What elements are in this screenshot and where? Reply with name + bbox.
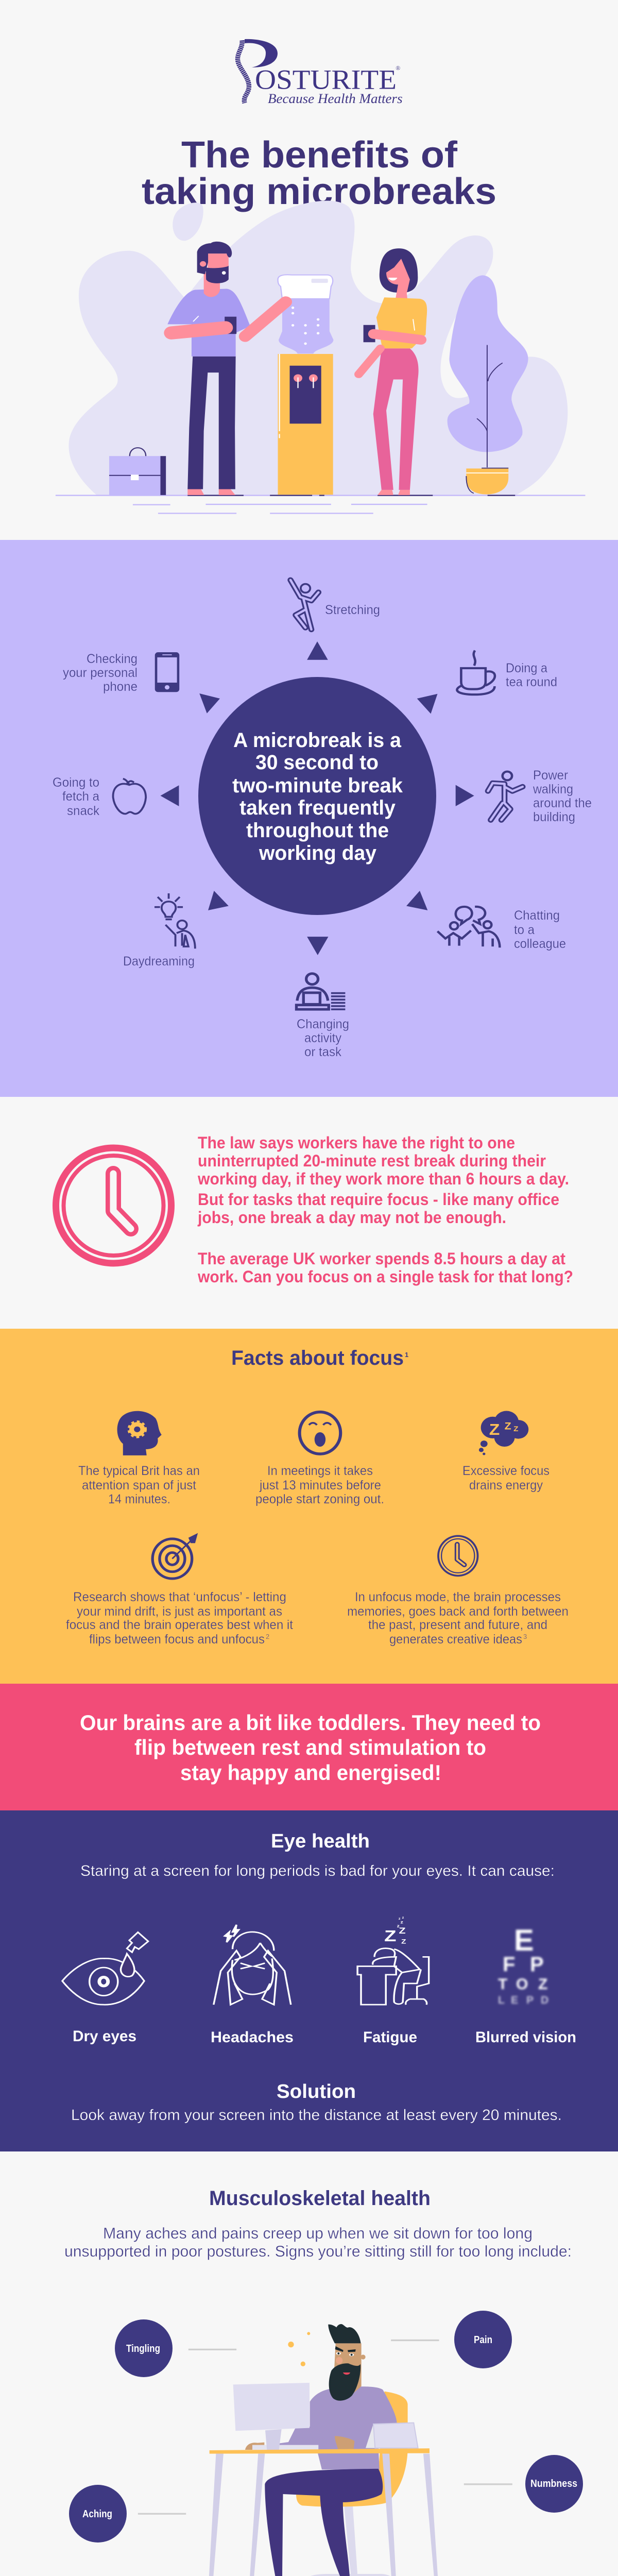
item: power walking [488,768,592,824]
sign: numbness [525,2455,583,2513]
item: fatigue: Z [399,1926,406,1936]
item: fatigue: Z [384,1928,397,1945]
item: fatigue [357,1916,429,2046]
item: phone: phone [103,680,138,694]
logo: Posturite: OSTURITE [255,64,397,95]
plant [448,275,528,495]
item: chatting: to a [514,923,535,937]
central circle: 30 second to [255,751,379,774]
fact: excessive focus: Z [505,1420,511,1432]
sign: aching: Aching [82,2509,112,2520]
text: the law: The average UK worker spends 8.5 hours a day at [198,1249,565,1268]
item: power walking: walking [533,782,573,796]
banner: toddlers: stay happy and energised! [180,1760,441,1785]
item: blurred vision: E [511,1994,518,2006]
item: fatigue: z [401,1920,403,1925]
fact: excessive focus: Excessive focus [462,1464,550,1478]
fact: unfocus: flips between focus and unfocus [89,1632,265,1647]
item: fatigue: Fatigue [363,2029,417,2046]
text: the law: But for tasks that require focus - like many office [198,1190,559,1209]
fact: excessive focus: Z [489,1420,500,1438]
item: power walking: Power [533,768,568,783]
intro text [64,2224,572,2260]
fact: meetings: just 13 minutes before [259,1478,381,1493]
fact: unfocus: your mind drift, is just as important as [77,1604,282,1619]
item: fatigue: z [402,1916,404,1920]
item: changing activity: activity [304,1031,341,1045]
panel: what is a microbreak [0,540,618,1097]
item: blurred vision [475,1924,576,2046]
title: The benefits of [181,134,458,176]
item: snack: fetch a [62,789,99,804]
item: headaches: Headaches [211,2029,294,2046]
woman [358,248,427,495]
item: tea round: Doing a [506,661,547,675]
connector lines [138,2340,512,2514]
central circle: two-minute break [232,774,403,797]
item: phone: Checking [87,652,138,666]
item: snack: snack [67,804,99,818]
sign: aching [69,2485,127,2543]
panel: musculoskeletal health [64,2187,583,2576]
panel: eye health [0,1810,618,2151]
item: phone [63,652,179,694]
text: the law: The law says workers have the right to one [198,1133,515,1152]
item: stretching [290,580,380,630]
item: daydreaming: Daydreaming [123,954,195,969]
panel: the law on breaks [56,1133,573,1286]
banner: toddlers: flip between rest and stimulation to [134,1735,486,1759]
fact: unfocus [66,1533,293,1647]
hero illustration: colleagues at water cooler [56,201,585,513]
arrows around circle [160,641,474,955]
fact: unfocus: 2 [266,1633,269,1640]
fact: attention span: attention span of just [82,1478,196,1493]
item: snack [53,775,146,818]
item: phone: your personal [63,666,138,680]
title [142,134,496,212]
item: headaches [211,1925,294,2046]
item: power walking: building [533,810,575,824]
item: chatting: Chatting [514,908,560,923]
fact: attention span [78,1411,200,1506]
text: the law: working day, if they work more than 6 hours a day. [197,1170,569,1188]
banner: toddlers [0,1684,618,1810]
intro text: Many aches and pains creep up when we sit down for too long [103,2224,533,2242]
central circle: A microbreak is a [233,729,402,752]
fact: brain in unfocus mode: generates creative ideas [389,1632,522,1647]
item: blurred vision: Z [538,1976,547,1993]
item: chatting: colleague [514,937,566,951]
item: changing activity: Changing [297,1017,349,1031]
item: power walking: around the [533,796,592,810]
item: tea round: tea round [506,675,557,689]
text: the law: jobs, one break a day may not be enough. [197,1208,506,1227]
fact: brain in unfocus mode: 3 [523,1633,527,1640]
central circle [198,677,436,915]
item: blurred vision: Blurred vision [475,2029,576,2046]
solution text: Look away from your screen into the distance at least every 20 minutes. [71,2107,562,2124]
heading: Facts about focus [231,1347,404,1369]
item: blurred vision: T [498,1976,507,1993]
item: blurred vision: P [530,1953,544,1976]
heading: solution: Solution [277,2081,356,2103]
logo: Posturite: ® [396,64,400,72]
text: the law: uninterrupted 20-minute rest break during their [198,1151,546,1170]
fact: excessive focus [462,1411,550,1493]
sign: tingling [115,2319,173,2377]
heading: Musculoskeletal health [209,2187,431,2210]
fact: excessive focus: Z [513,1425,519,1433]
item: blurred vision: P [526,1994,534,2006]
banner: toddlers: Our brains are a bit like toddlers. They need to [80,1710,541,1735]
heading: eye health: Eye health [271,1831,370,1852]
item: blurred vision: F [503,1953,515,1976]
sign: pain [454,2311,512,2368]
text: the law [197,1133,573,1286]
title: taking microbreaks [142,171,496,212]
item: snack: Going to [53,775,99,790]
item: fatigue: z [399,1918,401,1921]
item: stretching: Stretching [325,603,380,617]
fact: meetings: people start zoning out. [255,1492,384,1506]
panel: facts about focus [0,1329,618,1684]
item: dry eyes [62,1932,148,2045]
fact: brain in unfocus mode: the past, present and future, and [368,1618,547,1632]
central circle: working day [259,842,377,865]
logo: Posturite [238,39,403,106]
sign: pain: Pain [474,2334,492,2346]
item: fatigue: z [397,1924,400,1928]
briefcase [109,448,166,495]
icon: clock [56,1148,171,1263]
item: tea round [457,651,557,694]
fact: meetings [255,1412,384,1506]
item: blurred vision: D [541,1994,548,2006]
central circle: taken frequently [239,796,396,819]
logo: Posturite: Because Health Matters [268,91,403,106]
central circle: throughout the [246,819,389,842]
intro text: unsupported in poor postures. Signs you’re sitting still for too long include: [64,2242,572,2260]
fact: brain in unfocus mode: In unfocus mode, the brain processes [355,1590,561,1604]
fact: unfocus: Research shows that ‘unfocus’ - letting [73,1590,286,1604]
fact: unfocus: focus and the brain operates best when it [66,1618,293,1632]
item: changing activity: or task [304,1045,341,1059]
sign: numbness: Numbness [530,2478,577,2489]
man [167,242,286,495]
item: fatigue: Z [401,1938,406,1945]
water cooler [278,275,333,495]
illustration: man sitting at desk [102,2324,523,2576]
text: the law: work. Can you focus on a single task for that long? [197,1267,573,1286]
fact: attention span: 14 minutes. [108,1492,170,1506]
item: blurred vision: L [498,1994,505,2006]
fact: brain in unfocus mode: memories, goes back and forth between [347,1604,569,1619]
item: blurred vision: O [516,1976,528,1993]
sign: tingling: Tingling [126,2343,160,2354]
item: blurred vision: E [514,1924,534,1957]
item: changing activity [297,974,349,1059]
fact: meetings: In meetings it takes [267,1464,373,1478]
fact: excessive focus: drains energy [469,1478,543,1493]
item: daydreaming [123,893,195,969]
fact: brain in unfocus mode [347,1536,569,1647]
heading: 1 [405,1351,408,1359]
intro text: Staring at a screen for long periods is bad for your eyes. It can cause: [80,1862,555,1879]
item: dry eyes: Dry eyes [73,2028,136,2045]
item: chatting [437,907,566,951]
fact: attention span: The typical Brit has an [78,1464,200,1478]
